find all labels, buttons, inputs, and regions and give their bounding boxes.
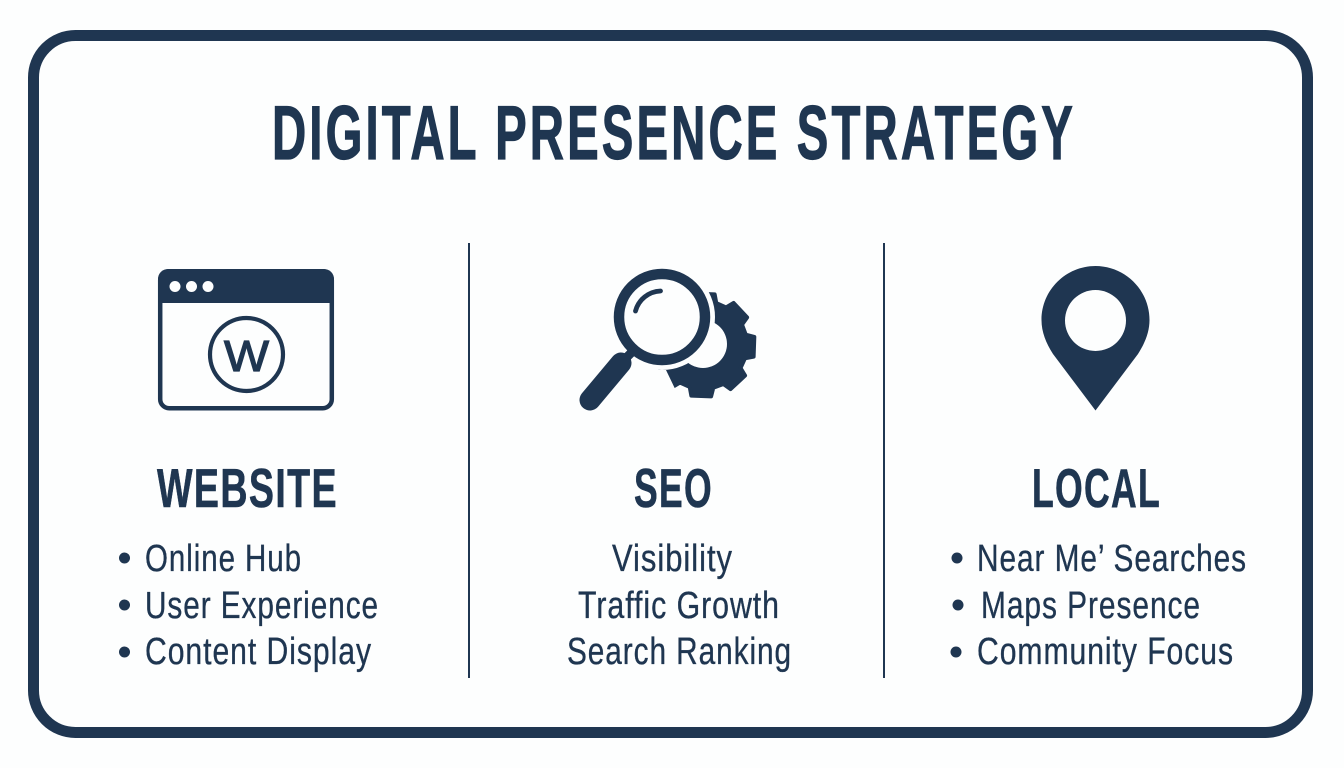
heading: seo: SEO — [634, 457, 713, 519]
panel: seo — [567, 264, 792, 673]
list: local — [950, 538, 1247, 673]
list: website: Content Display — [145, 631, 372, 673]
icon: browser window — [158, 269, 334, 408]
icon: magnifier and gear — [590, 264, 756, 400]
icon: map pin — [1042, 266, 1150, 410]
heading: local: LOCAL — [1032, 457, 1161, 519]
icon: browser window: W — [224, 332, 270, 381]
list: seo: Traffic Growth — [578, 585, 780, 627]
divider left — [468, 243, 470, 678]
heading: website: WEBSITE — [157, 457, 338, 519]
divider right — [883, 243, 885, 678]
list: website — [119, 538, 379, 673]
list: local: Community Focus — [977, 631, 1234, 673]
panel: local — [950, 266, 1247, 673]
list: local: Near Me’ Searches — [977, 538, 1247, 580]
list: seo: Visibility — [612, 538, 733, 580]
list: seo — [567, 538, 792, 673]
list: local: Maps Presence — [981, 585, 1201, 627]
list: website: User Experience — [145, 585, 379, 627]
list: website: Online Hub — [145, 538, 302, 580]
panel: website — [119, 269, 379, 673]
list: seo: Search Ranking — [567, 631, 792, 673]
